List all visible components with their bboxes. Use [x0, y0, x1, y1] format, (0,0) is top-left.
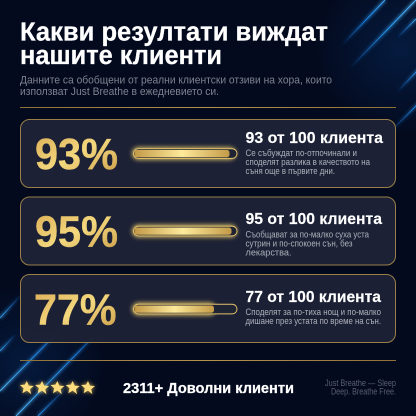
stat description [246, 307, 381, 326]
title [20, 18, 328, 70]
subtitle: използват Just Breathe в ежедневието си. [20, 86, 219, 98]
icon: five rating stars [20, 381, 95, 394]
brand tagline: Deep. Breathe Free. [331, 386, 396, 396]
percentage: 93%: 93% [35, 131, 118, 179]
brand tagline [325, 378, 396, 396]
title: Какви резултати виждат [20, 18, 328, 46]
percentage: 77%: 77% [34, 286, 116, 334]
progress bar: 93% [132, 147, 237, 160]
percentage: 95%: 95% [35, 208, 118, 256]
stat description: съня още в първите дни. [246, 166, 335, 176]
panel: 93% result [20, 120, 396, 188]
stat description: дишане през устата по време на сън. [246, 316, 381, 326]
stat description: споделят разлика в качеството на [246, 157, 370, 167]
stat heading: 77 от 100 клиента [246, 289, 381, 306]
progress bar: 95% [132, 224, 237, 238]
title: нашите клиенти [20, 42, 222, 70]
stat heading: 93 от 100 клиента [246, 130, 383, 147]
stat description: Съобщават за по-малко суха уста [246, 230, 369, 240]
panel: 77% result [20, 274, 396, 342]
progress bar: 77% [132, 302, 237, 316]
stat description [246, 230, 369, 258]
top divider [20, 107, 396, 108]
stat heading: 95 от 100 клиента [246, 211, 382, 228]
brand tagline: Just Breathe — Sleep [325, 378, 396, 388]
subtitle: Данните са обобщени от реални клиентски отзиви на хора, които [20, 74, 332, 86]
stat description: Се събуждат по-отпочинали и [246, 148, 357, 158]
satisfied clients count: 2311+ Доволни клиенти [123, 380, 294, 397]
subtitle [20, 74, 332, 98]
stat description: сутрин и по-спокоен сън, без [246, 238, 352, 248]
stat description [246, 148, 370, 176]
bottom divider [20, 360, 396, 361]
stat description: Споделят за по-тиха нощ и по-малко [246, 307, 381, 317]
panel: 95% result [20, 197, 396, 265]
stat description: лекарства. [246, 248, 292, 258]
